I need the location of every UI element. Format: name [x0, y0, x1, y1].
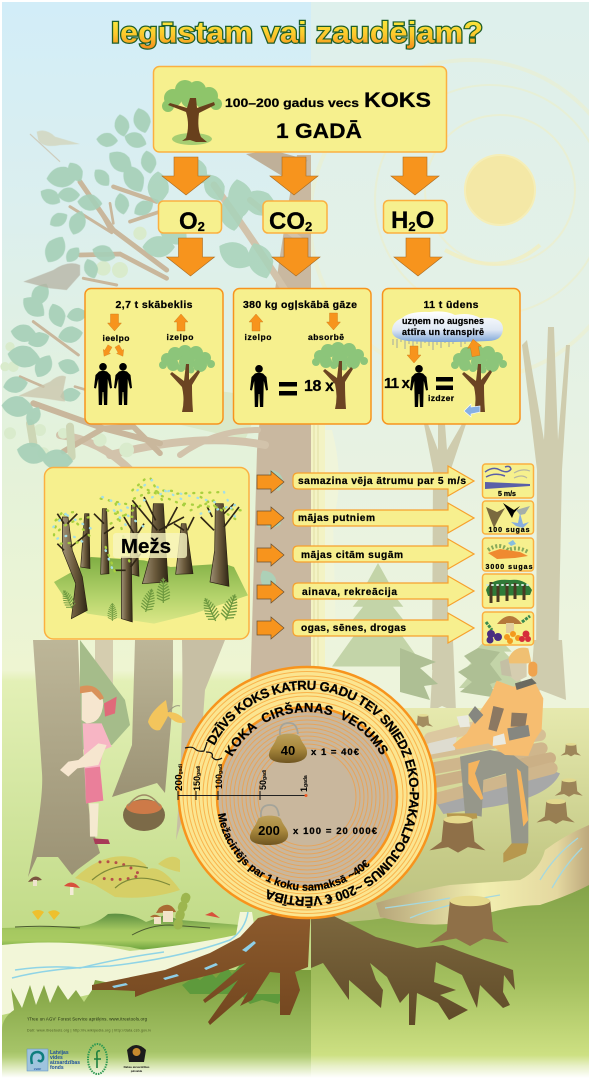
logo: LVAF: LVAF [34, 1067, 41, 1071]
age ruler: 1gada [299, 775, 309, 792]
label: izelpo: izelpo [166, 332, 194, 342]
title: Iegūstam vai zaudējam? [111, 16, 483, 50]
logo: LVAF [27, 1049, 80, 1071]
sun [310, 60, 589, 380]
benefit: berries [293, 613, 474, 643]
age ruler [174, 763, 309, 800]
curved text: ecosystem services value: DZĪVS KOKS KATRU GADU TEV SNIEDZ EKO-PAKALPOJUMUS ~200 € VĒRTĪBA [206, 680, 420, 908]
logo: LVAF: aizsardzības [50, 1060, 80, 1066]
river right [376, 825, 589, 925]
benefit: birds: mājas putniem [298, 513, 375, 524]
background: conifers right side [332, 563, 527, 700]
arrow: to left person [100, 344, 114, 358]
thumbnail: other species [482, 538, 534, 571]
credits [27, 1016, 151, 1032]
benefit: other species: mājas citām sugām [301, 550, 403, 561]
forest floor plants [15, 892, 220, 935]
background: left tree trunk and branches [60, 150, 311, 700]
arrow: transpiration up [466, 338, 483, 357]
cloud text: uzņem no augsnes [402, 316, 484, 326]
equals sign [436, 377, 453, 390]
arrow: exhale [249, 314, 263, 331]
woodcutter with chainsaw on logs [428, 648, 560, 863]
label: izdzer: izdzer [428, 393, 455, 403]
gloves [457, 715, 506, 746]
arrow: tree to O2 [162, 157, 210, 195]
outer ring [178, 667, 436, 918]
benefit: other species [293, 539, 474, 569]
arrow: forest to birds [257, 507, 284, 529]
benefit: landscape [293, 576, 474, 606]
left green mound [2, 914, 250, 951]
right ground [311, 708, 589, 1000]
arrow: to right person [113, 344, 127, 358]
benefit: wind: samazina vēja ātrumu par 5 m/s [298, 476, 466, 487]
label: ieelpo: ieelpo [102, 333, 130, 343]
box: H2O: O [416, 207, 434, 234]
benefit: birds [293, 503, 474, 533]
icon: person 2 [114, 363, 132, 405]
branches [57, 497, 239, 570]
forest illustration [53, 477, 248, 624]
logo: nature protection board: Dabas aizsardzības [124, 1065, 150, 1069]
logo: LVAF: Latvijas [50, 1050, 69, 1056]
forest ground [54, 557, 248, 624]
text: 18 x: 18 x [304, 378, 334, 395]
text: x 1 = 40€: x 1 = 40€ [311, 747, 360, 758]
foliage dots [53, 477, 241, 574]
icon: tree [159, 345, 215, 412]
boots [503, 843, 528, 863]
thumbnail: other species: 3000 sugas [486, 564, 533, 571]
purse: 200: 200 [258, 823, 280, 838]
thumbnail: wind: 5 m/s [498, 491, 516, 498]
right lower green ground [311, 880, 589, 1080]
mushrooms [28, 876, 80, 895]
panel: 100–200 year old tree in one year [154, 66, 446, 152]
panel: carbon dioxide [234, 288, 371, 424]
logs [430, 725, 552, 798]
credits: 'iTree un AGV' Forest Service aprēķins. www.itreetools.org [27, 1016, 148, 1022]
arrow: tree to CO2 [270, 157, 318, 195]
blue water arrows in roots [112, 941, 256, 988]
logo: LVAF: vides [50, 1055, 63, 1061]
box: O2: 2 [198, 219, 205, 234]
basket of mushrooms [123, 795, 165, 831]
left river [2, 912, 258, 1015]
box: CO2: 2 [305, 219, 312, 234]
background: bare trees right side [424, 327, 570, 712]
bracket: 100 to 200 years [185, 742, 222, 760]
roots right half [311, 905, 515, 1025]
logo: nature protection board: pārvalde [131, 1069, 143, 1073]
benefit: landscape: ainava, rekreācija [302, 587, 397, 598]
back trees [81, 504, 229, 586]
logo: nature protection board [124, 1045, 150, 1073]
box: H2O: H [391, 207, 408, 234]
label: Mežs: Mežs [121, 535, 171, 558]
text: KOKS: KOKS [364, 89, 431, 112]
panel: water [382, 288, 520, 424]
arrow: water down [407, 346, 421, 363]
arrow: breathe out [174, 314, 188, 331]
trousers [460, 750, 528, 844]
cloud [392, 311, 503, 342]
icon: tree [451, 345, 507, 412]
head and helmet [507, 660, 527, 682]
icon: person 1 [94, 363, 112, 405]
arrow: forest to wind [257, 471, 284, 493]
arrow: forest to berries [257, 617, 284, 639]
arrow: absorb [326, 313, 340, 330]
curved text: felling age: KOKA CIRŠANAS VECUMS [224, 702, 388, 756]
background trunks lower left [28, 640, 225, 877]
icon: oak tree [162, 80, 222, 145]
purse: 40: 40 [281, 743, 295, 758]
arrow: CO2 to panel [272, 238, 320, 276]
text: x 100 = 20 000€: x 100 = 20 000€ [293, 826, 378, 837]
icon: person [250, 365, 268, 407]
birds on branches [18, 131, 80, 402]
arrow: H2O to panel [394, 238, 442, 276]
arrow: forest to landscape [257, 581, 284, 603]
thumbnail: birds: 100 sugas [488, 527, 530, 534]
thumbnail: landscape [482, 574, 534, 608]
icon: tree [312, 342, 368, 409]
dark grass tufts [182, 958, 284, 1004]
label: izelpo: izelpo [244, 332, 272, 342]
text: 1 GADĀ: 1 GADĀ [276, 120, 362, 143]
front trees [62, 517, 132, 622]
chainsaw bar [428, 737, 457, 755]
thumbnail: birds [482, 501, 534, 534]
label backdrop [113, 533, 187, 558]
arrow: forest to species [257, 544, 284, 566]
arrow: water to roots [464, 404, 480, 417]
big stump [430, 896, 509, 946]
background leaves, middle [142, 101, 286, 594]
box: O2 [158, 201, 222, 235]
purse: 40 [269, 723, 307, 763]
thumbnail: wind [482, 464, 534, 498]
inner heartwood [217, 707, 397, 887]
thumbnail: berries and mushrooms [482, 612, 534, 645]
age ruler: 200gadi [174, 763, 185, 791]
tree stumps right [413, 714, 583, 853]
logo: forest fund [88, 1044, 107, 1074]
label: absorbē: absorbē [308, 332, 344, 342]
panel: forest [44, 468, 249, 639]
tree cross-section disc [174, 666, 437, 920]
berry mounds [75, 856, 180, 898]
arrow: O2 to panel [166, 238, 214, 276]
bottom ground with grass [2, 970, 311, 1080]
box: CO2 [263, 201, 327, 235]
age ruler: 150gadi [192, 765, 202, 791]
box: CO2: CO [269, 208, 305, 235]
jacket [453, 681, 543, 756]
roots left half [92, 905, 311, 1025]
age ruler: 100gadi [214, 763, 224, 789]
arrow: tree to H2O [391, 157, 439, 195]
arrow: breathe in [108, 314, 122, 331]
background: left half [2, 2, 311, 1080]
heading: CO2 amount: 380 kg ogļskābā gāze [243, 299, 357, 311]
background: right half [311, 2, 589, 1080]
box: O2: O [179, 208, 198, 235]
credits: Dati: www.itreetools.org | http://lv.wikipedia.org | http://data.csb.gov.lv [27, 1028, 151, 1032]
icon: person [410, 365, 428, 407]
panel: oxygen [85, 288, 223, 424]
heading: oxygen amount: 2,7 t skābeklis [116, 299, 193, 311]
age ruler: 50gadi [258, 769, 268, 790]
purse: 200 [250, 805, 288, 845]
butterfly [148, 700, 186, 730]
background: left tree branches and leaves, upper left [0, 106, 167, 471]
rain [393, 334, 469, 350]
box: H2O: 2 [408, 219, 416, 234]
log pile shadow [437, 768, 560, 814]
text: 11 x: 11 x [384, 375, 411, 392]
central pale cut trunk stripes [307, 425, 339, 700]
benefit: berries: ogas, sēnes, drogas [301, 623, 406, 634]
logo: LVAF: fonds [50, 1065, 64, 1071]
curved text: logger payment: Mežacirtējs par 1 koku samaksā ~40€ [218, 813, 370, 891]
equals sign [279, 382, 297, 396]
box: H2O [384, 200, 447, 234]
text: tree age: 100–200 gadus vecs [225, 96, 359, 110]
benefit: wind [293, 466, 474, 496]
heading: water amount: 11 t ūdens [424, 299, 479, 311]
girl behind tree [60, 686, 117, 844]
ferns [59, 578, 242, 624]
panel: water: attīra un transpirē [402, 327, 484, 337]
